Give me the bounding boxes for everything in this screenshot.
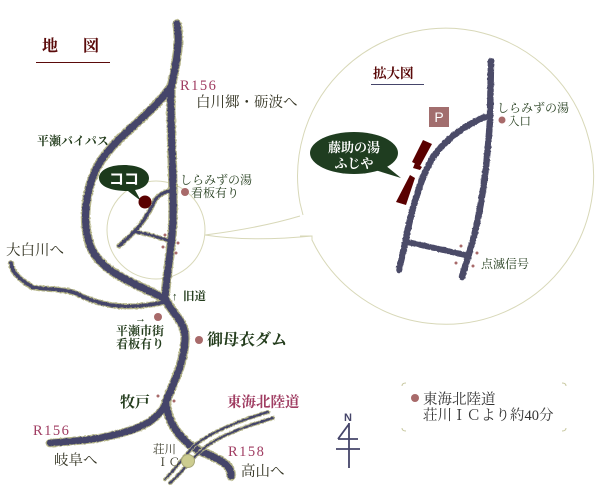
location dots [154,188,203,402]
access note: 東海北陸道 [423,391,496,408]
enlarged map labels: しらみずの湯 [497,101,569,115]
route labels: R158 [228,444,265,460]
green labels: 看板有り [191,185,239,200]
place labels: 岐阜へ [54,452,98,469]
callout: 藤助の湯 ふじや: ふじや [334,156,374,171]
title: 地図 [36,36,110,63]
enlarged map heading: 拡大図 [373,65,414,81]
callout: ココ [99,165,152,208]
enlargement circle outline [298,28,594,324]
green labels: 牧戸 [120,393,150,411]
locator circle with callout lines [107,181,312,279]
green labels: 旧道 [183,289,206,303]
building [396,140,432,205]
title: 地図: 図 [83,37,99,55]
north arrow [336,412,360,468]
place labels: ＩＣ [157,457,180,469]
green labels: 平瀬市街 [116,323,164,338]
parking sign [429,107,449,127]
access note [402,383,566,431]
enlarged map labels: 入口 [508,115,531,128]
title: 地図: 地 [42,36,58,55]
route labels [33,78,265,460]
callout: 藤助の湯 ふじや: 藤助の湯 [328,140,380,155]
north arrow: N [344,412,352,424]
green labels: ↑ [172,291,178,303]
callout: ココ: ココ [109,168,139,189]
callout: 藤助の湯 ふじや [310,132,401,178]
interchange marker [182,454,194,468]
green labels [37,133,287,411]
enlarged map labels [481,101,569,271]
green labels: → [135,313,146,325]
access note: 荘川ＩＣより約40分 [423,406,554,424]
enlarged map roads [399,61,491,277]
expressway double line [165,412,273,483]
place labels [6,94,298,480]
expressway label: 東海北陸道 [227,393,300,411]
place labels: 白川郷・砺波へ [196,94,298,111]
place labels: 大白川へ [6,242,64,259]
parking sign: P [434,109,444,125]
main road network [11,24,231,476]
green labels: 御母衣ダム [207,330,287,349]
enlarged map heading [371,65,424,85]
place labels: 荘川 [153,442,176,456]
signal dots [454,244,478,268]
green labels: 看板有り [116,336,164,351]
green labels: 平瀬バイパス [37,133,109,148]
place labels: 高山へ [241,463,284,480]
route labels: R156 [180,78,217,94]
route labels: R156 [33,423,70,439]
green labels: しらみずの湯 [180,173,252,187]
enlarged map labels: 点滅信号 [481,256,529,271]
